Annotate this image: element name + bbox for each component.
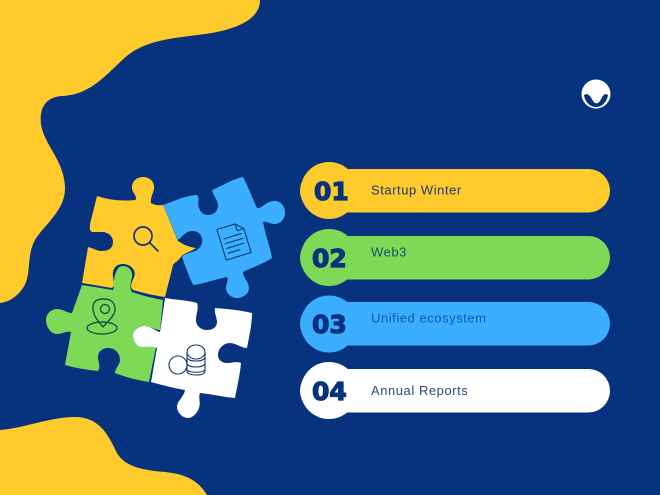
list item 4 [300,362,610,419]
blob: bottom-left yellow [0,417,207,495]
puzzle piece: blue document [163,177,285,298]
icon: magnifier [134,227,158,251]
list item 4: 04 [312,377,347,406]
list item 3: Unified ecosystem [371,310,487,326]
icon: location pin [87,299,117,334]
puzzle piece: yellow search [82,177,196,297]
list item 2: 02 [312,244,347,273]
list item 3 [300,296,610,352]
puzzle piece: white coins [133,298,252,418]
list item 2: Web3 [371,244,407,260]
list item 1: 01 [314,177,349,206]
list item 1: Startup Winter [371,182,462,198]
puzzle [46,177,285,418]
puzzle piece: green pin [46,266,163,382]
blob: top-left yellow [0,0,260,303]
list item 4: Annual Reports [371,383,468,398]
list item 2 [300,229,610,286]
list item 3: 03 [312,310,347,339]
icon: coins [169,345,205,375]
icon: document [217,222,251,260]
logo [582,80,610,108]
list item 1 [300,162,610,219]
